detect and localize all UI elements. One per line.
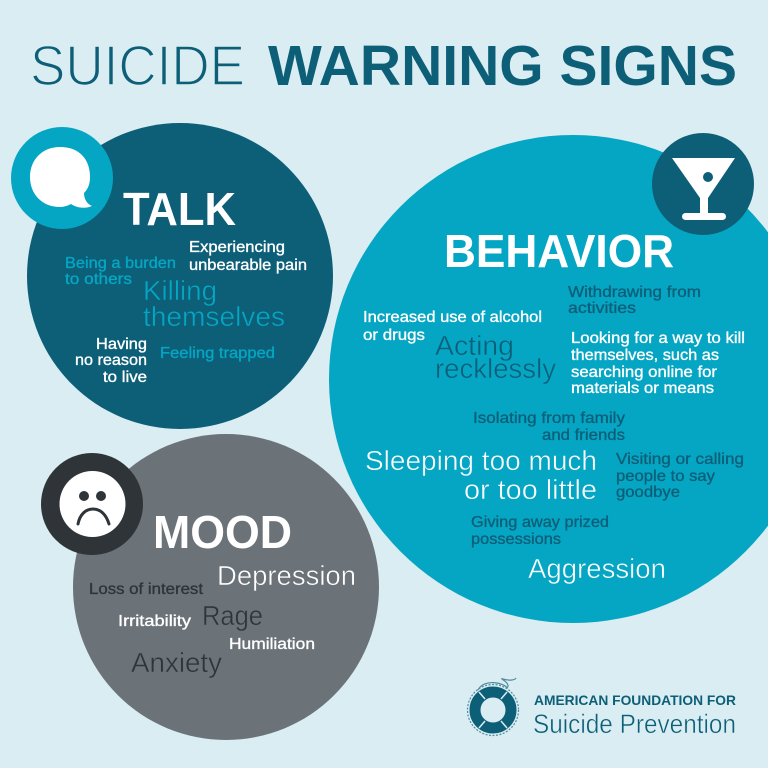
text: looking for a way: themselves, such as <box>571 347 719 364</box>
text: withdrawing: Withdrawing from <box>568 284 701 301</box>
text: sleeping: or too little <box>464 474 597 505</box>
text: depression: Depression <box>217 560 356 591</box>
icon: martini glass <box>652 133 754 235</box>
panel: talk <box>11 123 333 429</box>
text: alcohol: Increased use of alcohol <box>363 309 542 326</box>
text: sleeping: Sleeping too much <box>365 445 597 476</box>
text: visiting: goodbye <box>616 484 680 501</box>
text: withdrawing: activities <box>568 300 636 317</box>
text: visiting: Visiting or calling <box>616 451 744 468</box>
text: experiencing: Experiencing <box>189 239 285 256</box>
text: no reason to live: no reason <box>75 352 147 369</box>
text: isolating: Isolating from family <box>473 410 625 427</box>
logo: Suicide Prevention <box>533 709 736 739</box>
heading: mood: MOOD <box>153 506 292 558</box>
text: being a burden: Being a burden <box>65 255 176 272</box>
text: loss of interest: Loss of interest <box>89 581 204 598</box>
text: giving away: possessions <box>471 531 561 548</box>
text: acting recklessly: Acting <box>435 330 514 361</box>
text: rage: Rage <box>202 600 263 631</box>
text: no reason to live: to live <box>103 369 147 386</box>
text: feeling trapped: Feeling trapped <box>160 345 275 362</box>
panel: behavior <box>329 133 768 623</box>
panel: mood <box>41 434 379 740</box>
text: aggression: Aggression <box>528 553 666 584</box>
text: killing themselves: themselves <box>143 301 285 332</box>
title: SUICIDE <box>30 34 245 98</box>
text: killing themselves: Killing <box>143 275 217 306</box>
text: anxiety: Anxiety <box>131 647 222 678</box>
text: alcohol: or drugs <box>363 327 425 344</box>
icon: speech bubble <box>11 127 113 229</box>
icon: life ring <box>468 678 518 736</box>
text: experiencing: unbearable pain <box>189 257 307 274</box>
text: irritability: Irritability <box>118 613 191 630</box>
title <box>30 34 737 98</box>
title: WARNING SIGNS <box>268 34 737 98</box>
text: looking for a way: searching online for <box>571 364 718 381</box>
text: looking for a way: Looking for a way to kill <box>571 330 745 347</box>
text: giving away: Giving away prized <box>471 514 609 531</box>
text: acting recklessly: recklessly <box>435 353 556 384</box>
text: humiliation: Humiliation <box>229 636 315 653</box>
logo <box>468 678 736 739</box>
logo wordmark: AMERICAN FOUNDATION FOR <box>534 692 736 708</box>
text: isolating: and friends <box>542 427 625 444</box>
text: looking for a way: materials or means <box>571 380 714 397</box>
text: being a burden: to others <box>65 271 132 288</box>
text: visiting: people to say <box>616 468 715 485</box>
text: no reason to live: Having <box>96 336 147 353</box>
heading: talk: TALK <box>123 183 236 235</box>
icon: sad face <box>41 453 143 555</box>
heading: behavior: BEHAVIOR <box>444 225 674 277</box>
